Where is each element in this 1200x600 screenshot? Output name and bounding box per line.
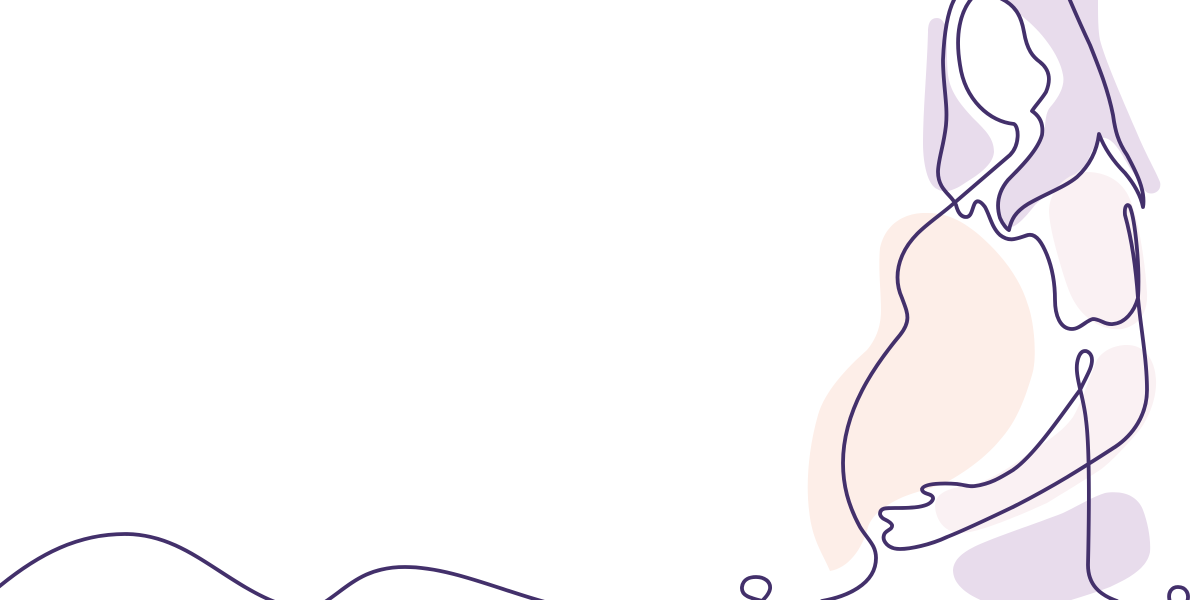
line: small loop at right edge <box>1169 587 1188 600</box>
blob: torso pale pink <box>1049 172 1147 329</box>
blob: back hair purple <box>1000 0 1160 227</box>
blob: left hair purple <box>923 18 994 191</box>
line: small ground loop <box>742 577 770 600</box>
line: profile and hair <box>998 0 1144 230</box>
line: second ground wave <box>325 567 545 600</box>
line: first ground wave <box>0 534 275 600</box>
blob: belly peach <box>808 213 1035 571</box>
blob: arm pale pink <box>935 345 1156 533</box>
blob: floor shadow purple <box>953 492 1150 600</box>
line: back hair, dress, arm and hands <box>880 0 1147 600</box>
line: belly and face <box>822 0 1018 600</box>
